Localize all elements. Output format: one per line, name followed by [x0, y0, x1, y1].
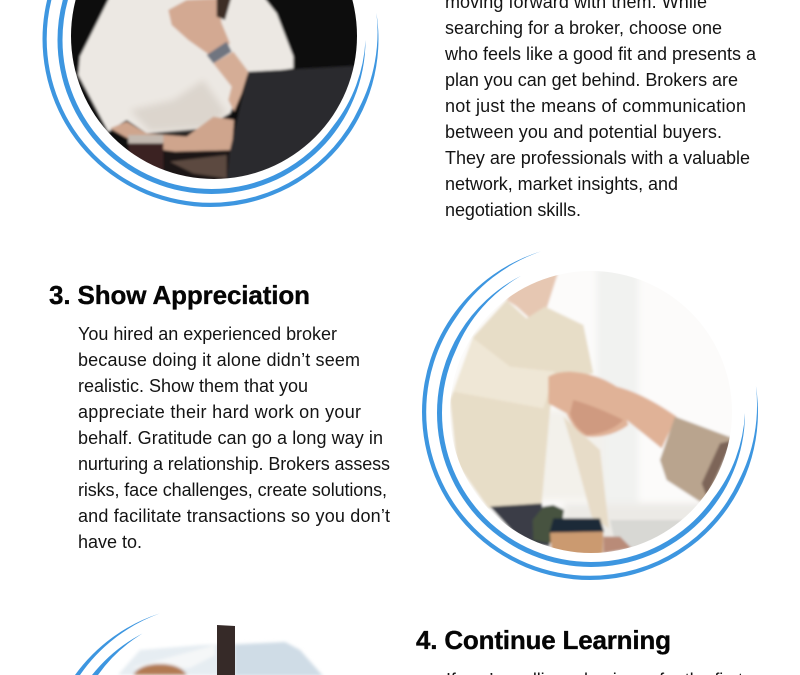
text block: show appreciation: risks, face challenges, create solutions,	[78, 480, 387, 500]
photo: office background with person	[118, 642, 323, 675]
text block: broker advice (continued): plan you can get behind. Brokers are	[445, 70, 738, 90]
text block: show appreciation: behalf. Gratitude can go a long way in	[78, 428, 383, 448]
photo circle: man at laptop with blue rings	[42, 0, 378, 207]
blue ring: outer	[75, 613, 160, 675]
photo circle: partial view with blue rings	[75, 613, 323, 675]
blue ring: inner	[92, 634, 142, 675]
text block: broker advice (continued): network, market insights, and	[445, 174, 678, 194]
text block: show appreciation: realistic. Show them that you	[78, 376, 308, 396]
text block: broker advice (continued): between you and potential buyers.	[445, 122, 722, 142]
photo circle: handshake with blue rings	[422, 251, 758, 580]
heading: 4. Continue Learning: 4. Continue Learning	[416, 625, 671, 655]
text block: show appreciation: You hired an experienced broker	[78, 324, 337, 344]
text block: show appreciation	[78, 324, 390, 552]
text block: broker advice (continued)	[444, 0, 757, 220]
blue ring: inner	[437, 276, 745, 567]
text block: broker advice (continued): They are professionals with a valuable	[445, 148, 750, 168]
text block: show appreciation: because doing it alone didn’t seem	[78, 350, 360, 370]
photo: two people shaking hands	[450, 272, 730, 553]
text block: show appreciation: appreciate their hard work on your	[78, 402, 361, 422]
text block: broker advice (continued): searching for a broker, choose one	[445, 18, 722, 38]
text block: show appreciation: have to.	[78, 532, 142, 552]
text block: broker advice (continued): negotiation skills.	[445, 200, 581, 220]
blue ring: outer	[422, 251, 758, 580]
text block: show appreciation: nurturing a relationship. Brokers assess	[78, 454, 390, 474]
blue ring: outer	[42, 0, 378, 207]
text block: broker advice (continued): not just the means of communication	[445, 96, 746, 116]
text block: show appreciation: and facilitate transactions so you don’t	[78, 506, 390, 526]
photo: man thinking at a laptop	[71, 0, 357, 179]
blue ring: inner	[58, 0, 366, 194]
photo detail: dark post	[217, 625, 235, 675]
heading: 3. Show Appreciation: 3. Show Appreciation	[49, 280, 310, 310]
text block: broker advice (continued): who feels like a good fit and presents a	[444, 44, 757, 64]
